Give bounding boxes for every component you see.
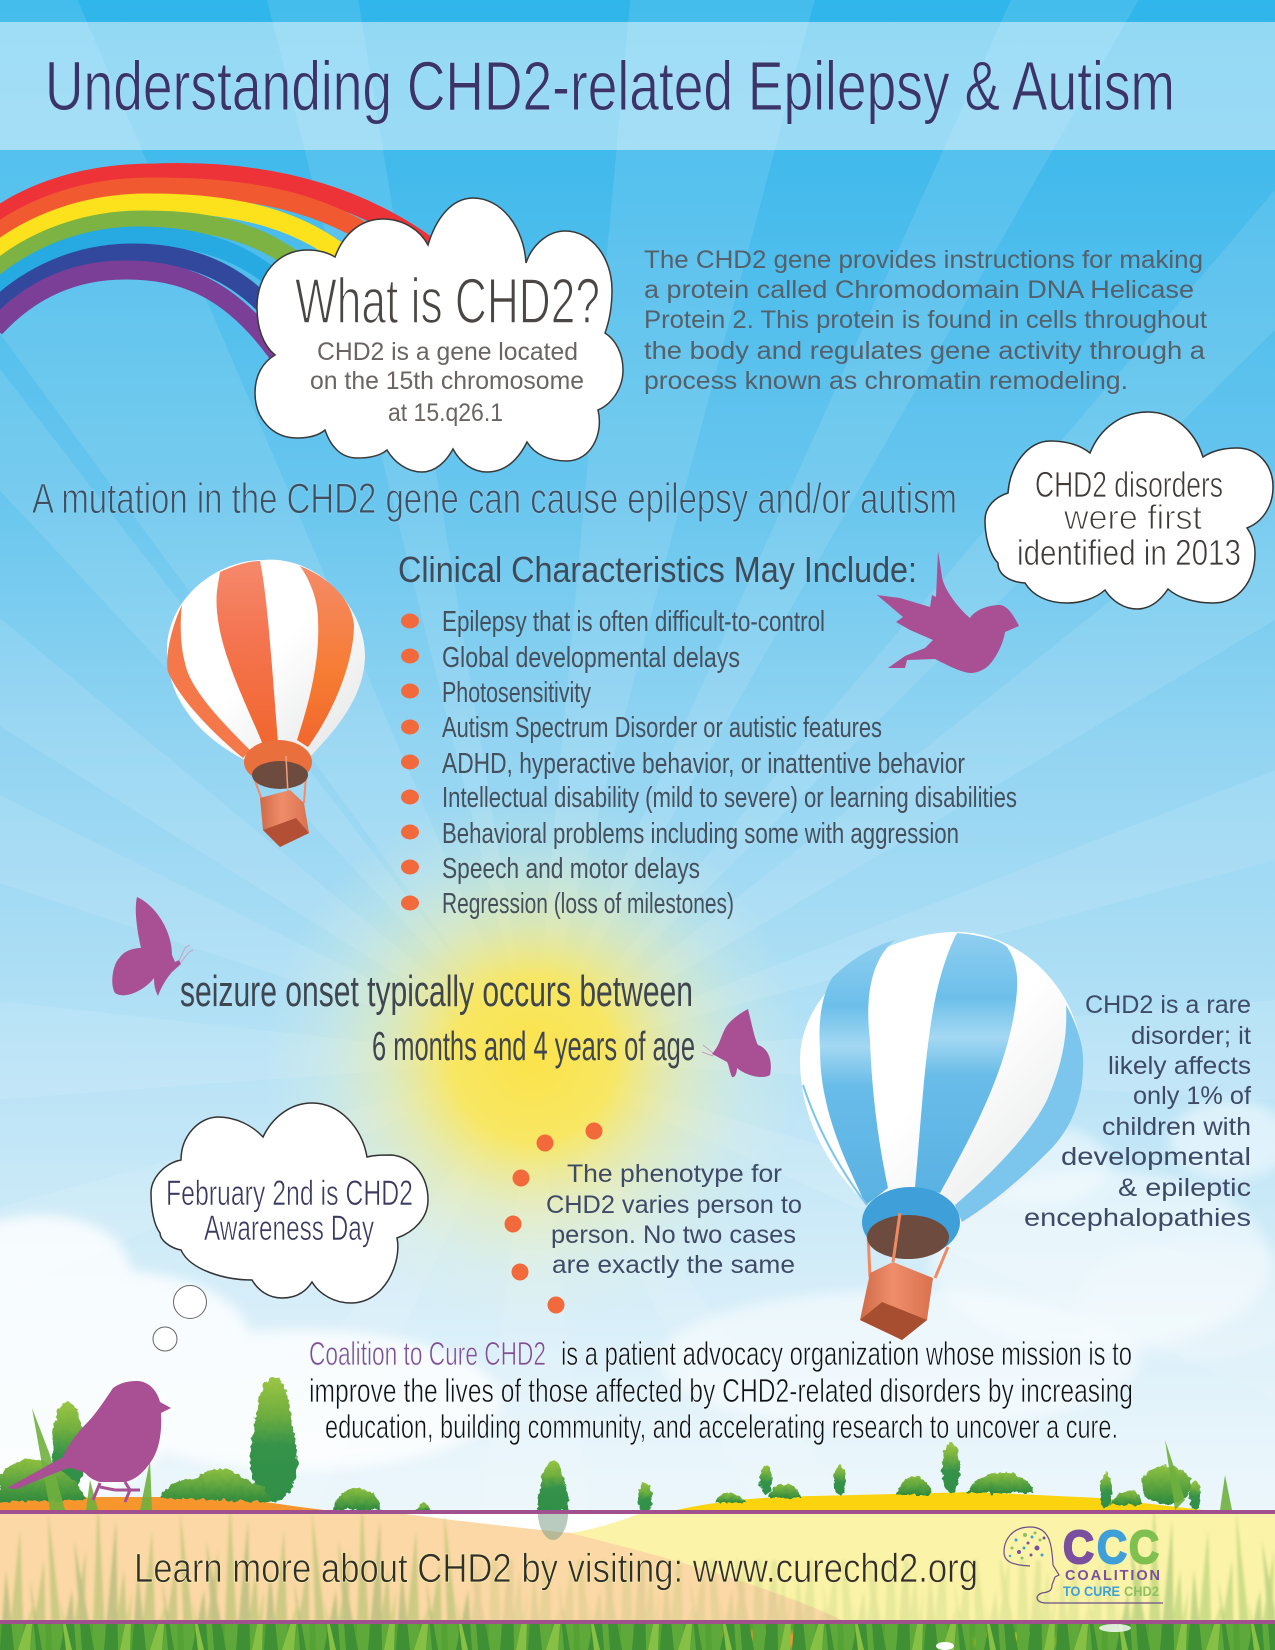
cloud: what is CHD2 bbox=[255, 198, 623, 472]
rare disorder text bbox=[1024, 991, 1251, 1232]
phenotype text: CHD2 varies person to bbox=[546, 1191, 802, 1219]
cloud text bbox=[1017, 464, 1241, 573]
seizure onset text: 6 months and 4 years of age bbox=[372, 1023, 695, 1069]
rainbow bbox=[0, 173, 440, 372]
orange dot ring bbox=[504, 1122, 602, 1314]
cloud heading: What is CHD2? bbox=[295, 265, 600, 337]
phenotype text: are exactly the same bbox=[552, 1251, 795, 1279]
mutation heading: A mutation in the CHD2 gene can cause epilepsy and/or autism bbox=[32, 475, 957, 523]
landscape hills and trees bbox=[0, 1377, 1275, 1625]
cloud: first identified bbox=[985, 412, 1273, 609]
clinical characteristics heading: Clinical Characteristics May Include: bbox=[398, 549, 917, 590]
rare disorder text: disorder; it bbox=[1131, 1022, 1251, 1050]
cloud text bbox=[310, 338, 584, 427]
list text: Autism Spectrum Disorder or autistic features bbox=[442, 712, 882, 744]
soft clouds in sky bbox=[0, 1100, 1275, 1510]
cloud text: were first bbox=[1063, 499, 1203, 537]
yellow hill bbox=[667, 1492, 1220, 1512]
title banner bbox=[0, 22, 1275, 150]
logo letters: TO CURE bbox=[1063, 1584, 1120, 1599]
phenotype text: The phenotype for bbox=[567, 1160, 782, 1188]
gene description text bbox=[644, 246, 1207, 395]
footer band rules bbox=[0, 1510, 1275, 1624]
strip ground bbox=[0, 1513, 1275, 1625]
icon: butterfly left bbox=[112, 897, 193, 996]
orange hill bbox=[0, 1497, 340, 1512]
footer link text: Learn more about CHD2 by visiting: www.curechd2.org bbox=[134, 1545, 978, 1591]
list text bbox=[442, 606, 1017, 920]
gene description text: Protein 2. This protein is found in cells throughout bbox=[644, 306, 1207, 334]
cloud text: on the 15th chromosome bbox=[310, 367, 584, 395]
ghost of tree below rule bbox=[538, 1514, 568, 1540]
list text: Behavioral problems including some with aggression bbox=[442, 818, 959, 850]
cloud text: CHD2 is a gene located bbox=[317, 338, 578, 366]
logo letters: C bbox=[1129, 1521, 1159, 1573]
cloud text: February 2nd is CHD2 bbox=[166, 1174, 413, 1213]
rare disorder text: CHD2 is a rare bbox=[1085, 991, 1251, 1019]
seizure onset text: seizure onset typically occurs between bbox=[180, 967, 693, 1016]
bushes bbox=[0, 1459, 1191, 1511]
icon: orange hot air balloon bbox=[167, 560, 365, 847]
phenotype text: person. No two cases bbox=[551, 1221, 796, 1249]
logo letters: CHD2 bbox=[1124, 1584, 1159, 1599]
cloud text: Awareness Day bbox=[204, 1209, 374, 1248]
list text: Global developmental delays bbox=[442, 642, 740, 674]
cloud text bbox=[166, 1174, 413, 1248]
gene description text: the body and regulates gene activity through a bbox=[644, 337, 1205, 365]
icon: butterfly right bbox=[702, 1009, 771, 1077]
gene description text: a protein called Chromodomain DNA Helicase bbox=[644, 276, 1194, 304]
trees bbox=[52, 1377, 1201, 1514]
rare disorder text: children with bbox=[1102, 1113, 1251, 1141]
list text: Speech and motor delays bbox=[442, 853, 700, 885]
icon: blue hot air balloon bbox=[800, 932, 1083, 1340]
cloud text: at 15.q26.1 bbox=[388, 399, 503, 427]
logo letters: C bbox=[1063, 1521, 1094, 1573]
rare disorder text: developmental bbox=[1061, 1143, 1251, 1171]
phenotype text bbox=[546, 1160, 802, 1279]
coalition paragraph bbox=[309, 1335, 1133, 1445]
icon: head outline with brain bbox=[1004, 1527, 1163, 1603]
grass blades above strip bbox=[32, 1408, 1232, 1510]
logo letters bbox=[1063, 1521, 1160, 1599]
list text: Regression (loss of milestones) bbox=[442, 888, 734, 920]
logo letters: C bbox=[1097, 1521, 1127, 1573]
seizure onset text bbox=[180, 967, 695, 1069]
rare disorder text: & epileptic bbox=[1118, 1174, 1251, 1202]
organisation name: Coalition to Cure CHD2 bbox=[309, 1335, 546, 1372]
list text: Epilepsy that is often difficult-to-control bbox=[442, 606, 825, 638]
gene description text: process known as chromatin remodeling. bbox=[644, 367, 1128, 395]
gene description text: The CHD2 gene provides instructions for making bbox=[644, 246, 1203, 274]
logo: Coalition to Cure CHD2 bbox=[1004, 1521, 1163, 1603]
foreground grass bbox=[0, 1624, 1275, 1650]
list text: Photosensitivity bbox=[442, 677, 591, 709]
icon: flying bird bbox=[877, 551, 1019, 673]
list text: Intellectual disability (mild to severe) or learning disabilities bbox=[442, 782, 1017, 814]
logo letters: COALITION bbox=[1065, 1568, 1160, 1584]
rare disorder text: only 1% of bbox=[1133, 1082, 1251, 1110]
bullet list bbox=[401, 606, 1017, 920]
rare disorder text: encephalopathies bbox=[1024, 1204, 1251, 1232]
bullets bbox=[401, 614, 419, 910]
thought cloud: awareness day bbox=[151, 1103, 428, 1351]
rare disorder text: likely affects bbox=[1108, 1052, 1251, 1080]
icon: sitting bird bbox=[7, 1381, 171, 1502]
list text: ADHD, hyperactive behavior, or inattentive behavior bbox=[442, 748, 965, 780]
thought bubbles bbox=[153, 1286, 206, 1351]
ghost grass in strip bbox=[0, 1513, 1275, 1621]
